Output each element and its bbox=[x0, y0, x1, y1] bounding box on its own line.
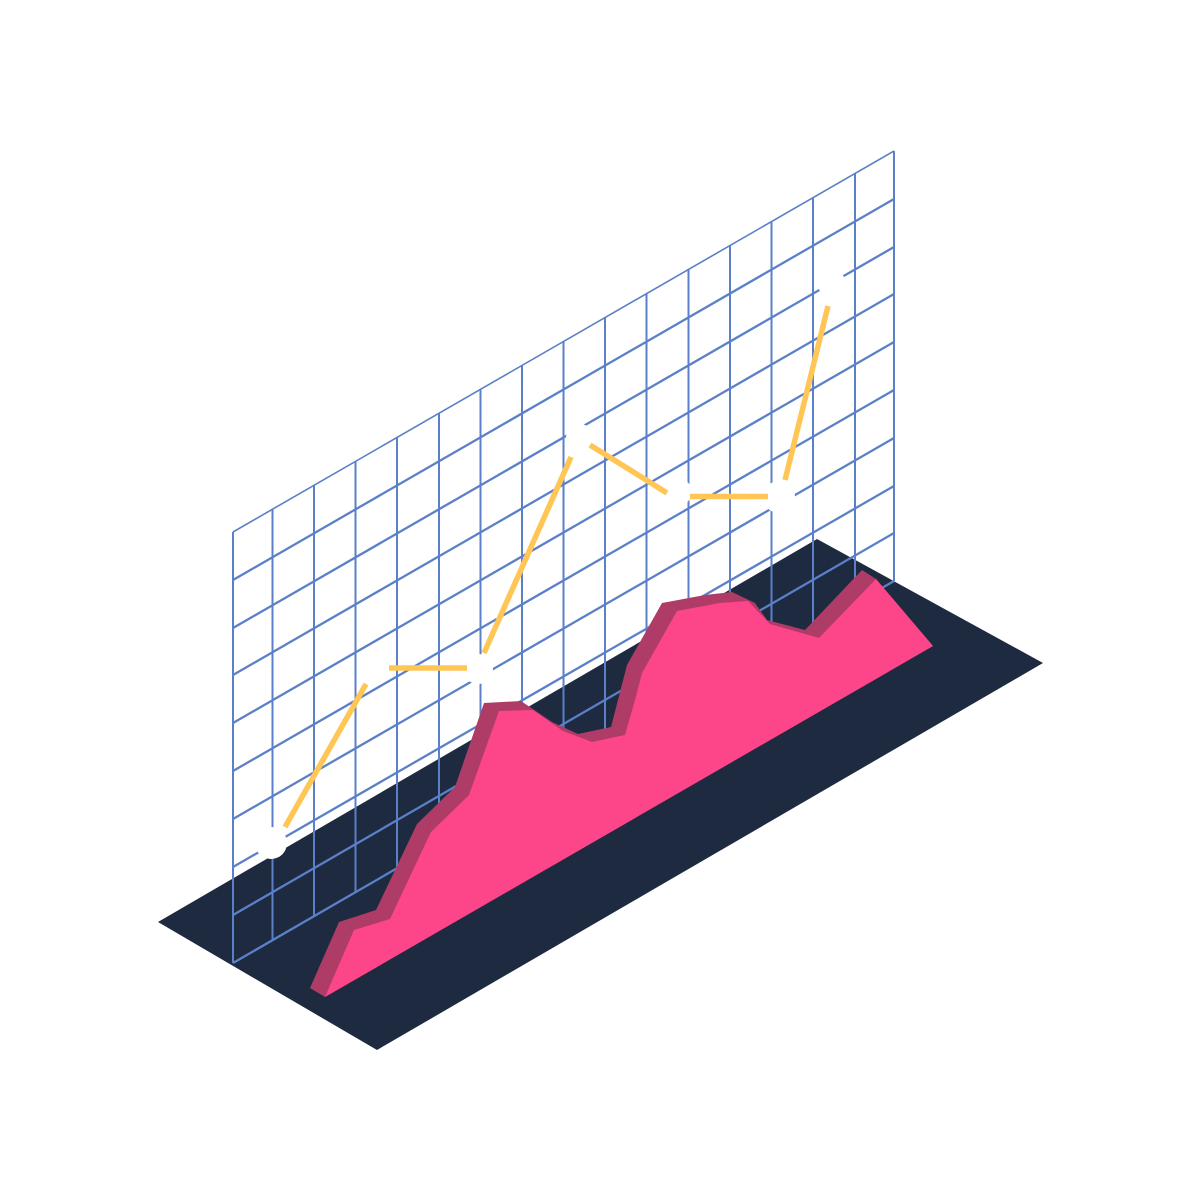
yellow line series bbox=[285, 306, 828, 827]
area chart side face bbox=[310, 570, 933, 997]
area chart front face bbox=[325, 579, 933, 997]
grid wall bbox=[233, 151, 894, 963]
floor platform bbox=[158, 539, 1043, 1050]
data point markers bbox=[255, 270, 846, 859]
